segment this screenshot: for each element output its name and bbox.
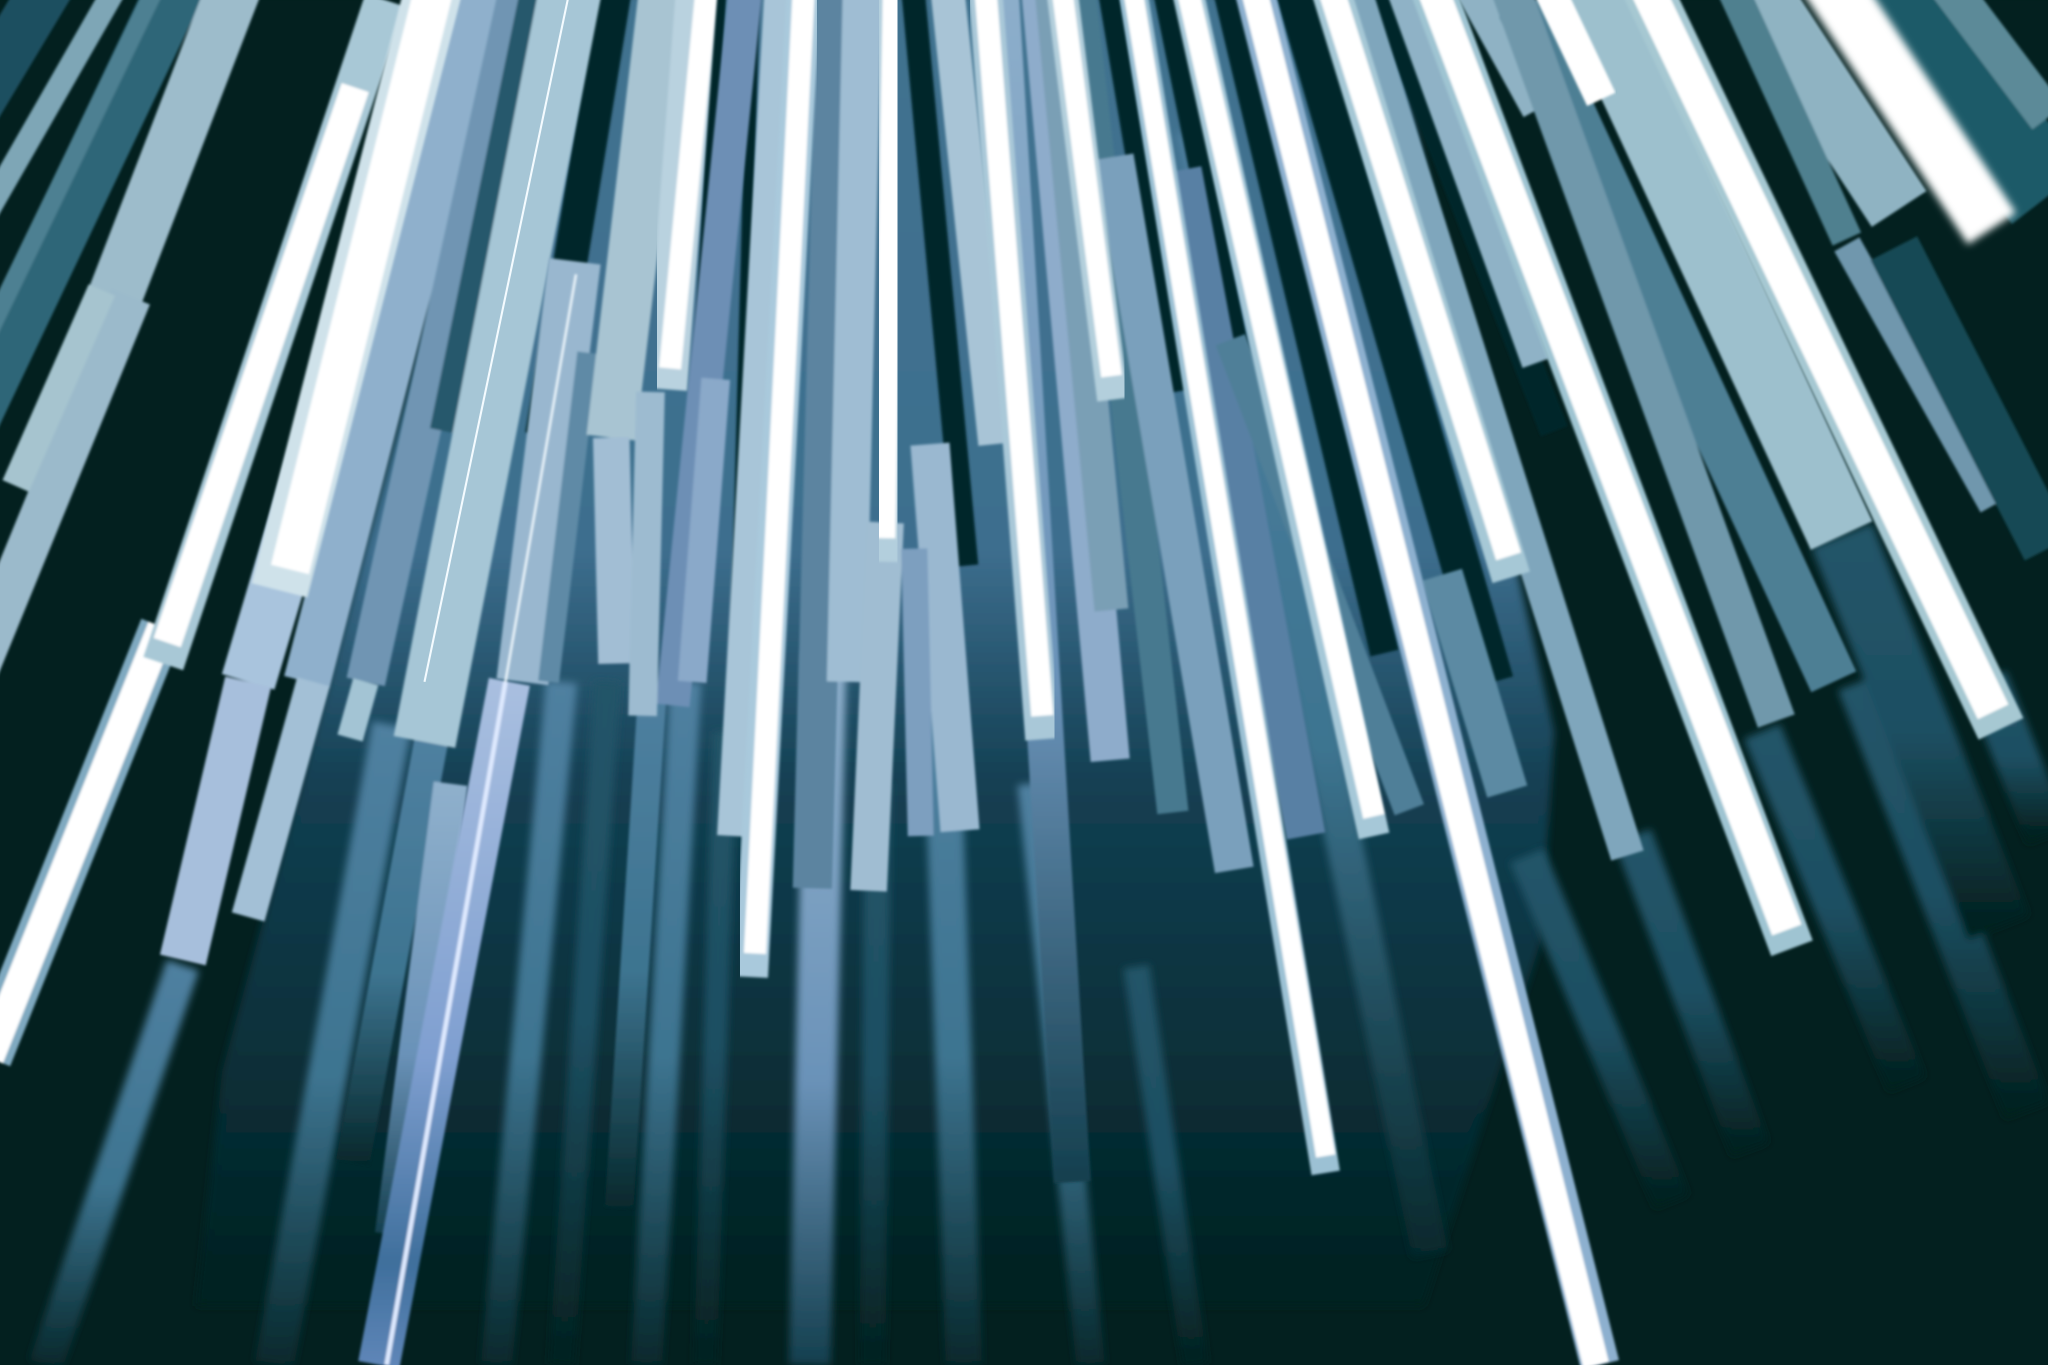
bright rod: left wide	[280, 0, 444, 590]
thin bright line: first	[424, 0, 579, 682]
bright rod: top right	[1808, 0, 1992, 229]
thin bright rod: long lavender	[379, 274, 576, 1365]
bright rod: left upper	[163, 0, 385, 664]
bright rod: centre short 1	[666, 0, 711, 389]
bright rod: top short	[1529, 0, 1601, 99]
base layer: dense rods behind centre	[196, 0, 1554, 1306]
bright rod: to 1530	[1627, 0, 2001, 729]
bright rod: centre right	[982, 0, 1042, 739]
bright rod: to 1158	[1318, 0, 1511, 577]
layer: dark gaps between rods	[542, 0, 1554, 682]
bright rod: long to 1015	[1126, 0, 1326, 1173]
layer: central blue rods	[522, 0, 1507, 1182]
bright rod: short with tip	[1057, 0, 1113, 400]
bright rod: far left lower	[0, 627, 162, 1058]
bright rod: to 1052	[1178, 0, 1374, 836]
layer: upper left teal and pale rods	[0, 0, 653, 1234]
bright rod: to 1372	[1417, 0, 1792, 948]
bright rod: longest to bottom	[1243, 0, 1600, 1365]
bright rod: centre long	[751, 0, 806, 977]
layer: upper right rods	[1341, 0, 2048, 856]
bright rod: centre short 2	[882, 0, 895, 562]
